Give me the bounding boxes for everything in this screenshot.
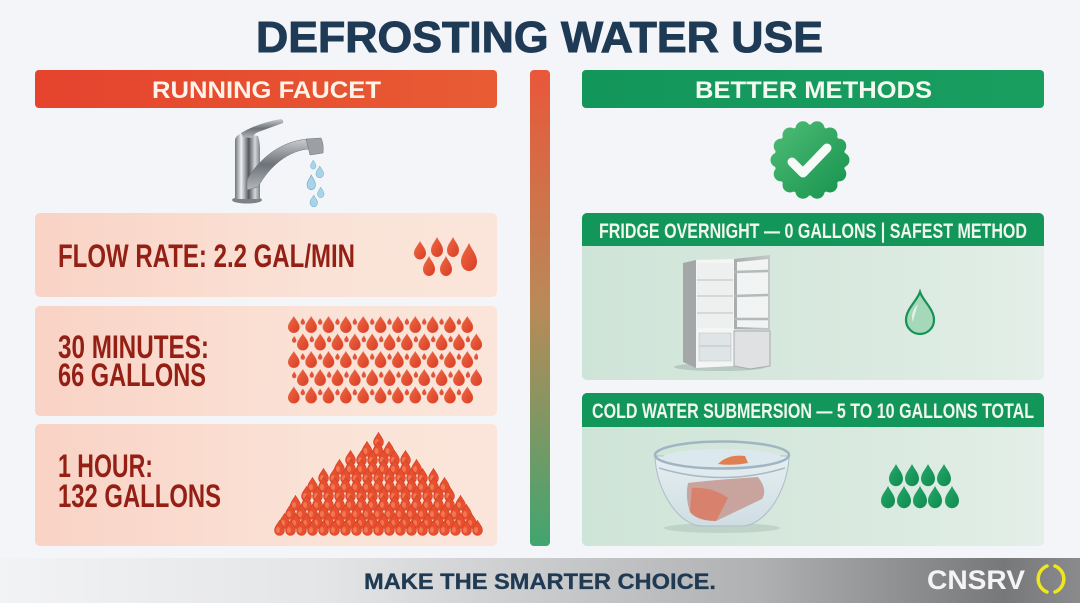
- panel: fridge overnight: [582, 213, 1044, 380]
- footer band: [0, 558, 1080, 603]
- text: 1 hour 132 gallons: 1 HOUR:: [58, 448, 153, 484]
- panel: better methods column: [582, 70, 1044, 546]
- icon: six drops: [414, 237, 477, 276]
- icon: single outline drop: [906, 292, 934, 334]
- chart: pile of drops: [274, 432, 483, 536]
- icon: nine green drops: [881, 464, 959, 508]
- divider: centre gradient bar: [530, 70, 550, 546]
- panel: cold water submersion: [582, 393, 1044, 546]
- footer tagline: MAKE THE SMARTER CHOICE.: [364, 569, 716, 594]
- icon: check badge: [770, 121, 850, 199]
- heading: better methods: [582, 70, 1044, 108]
- text: 30 minutes 66 gallons: [58, 329, 209, 393]
- icon: open fridge: [674, 255, 770, 371]
- title: DEFROSTING WATER USE: [256, 13, 823, 62]
- panel: running faucet column: [35, 70, 497, 546]
- panel: 1 hour: [35, 424, 497, 546]
- icon: dripping faucet: [232, 119, 324, 207]
- icon: glass bowl with meat: [655, 442, 789, 533]
- text: 1 hour 132 gallons: 132 GALLONS: [58, 478, 221, 514]
- heading: better methods: BETTER METHODS: [695, 77, 932, 104]
- panel: flow rate: FLOW RATE: 2.2 GAL/MIN: [58, 238, 355, 274]
- text: 30 minutes 66 gallons: 30 MINUTES:: [58, 329, 209, 365]
- logo: CNSRV: CNSRV: [927, 565, 1025, 595]
- text: 30 minutes 66 gallons: 66 GALLONS: [58, 357, 206, 393]
- panel: flow rate: [35, 213, 497, 297]
- heading: running faucet: RUNNING FAUCET: [152, 77, 381, 104]
- text: 1 hour 132 gallons: [58, 448, 221, 514]
- chart: grid of drops: [288, 316, 482, 404]
- logo: CNSRV: [927, 565, 1064, 595]
- heading: running faucet: [35, 70, 497, 108]
- panel: 30 minutes: [35, 306, 497, 416]
